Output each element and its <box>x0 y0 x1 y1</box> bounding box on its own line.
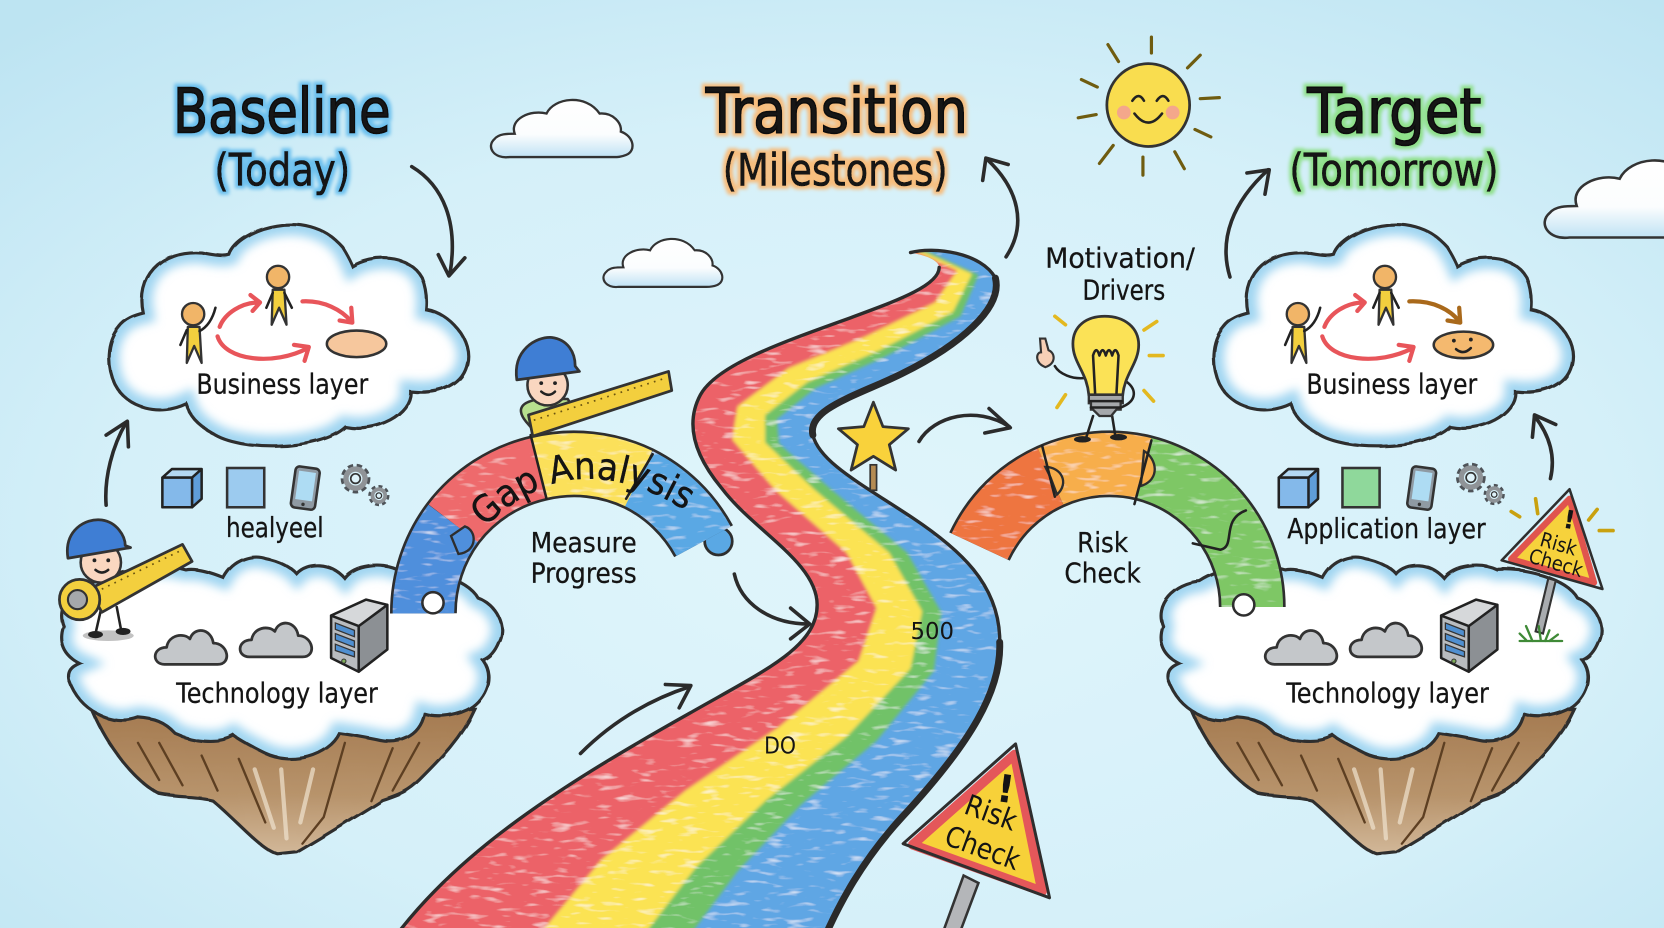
icon: server tower <box>1441 600 1497 672</box>
cloud shape <box>109 225 468 446</box>
road heavy shaded edge <box>812 278 1000 928</box>
heading: Target (Tomorrow) <box>1289 76 1498 197</box>
sign text: Risk Check: Risk <box>1537 527 1580 561</box>
process arrows <box>1322 295 1460 361</box>
rainbow road <box>400 248 1004 928</box>
heading: Transition (Milestones) <box>705 76 968 197</box>
rock base <box>93 709 474 854</box>
panel: target business layer cloud <box>1213 225 1572 446</box>
alert rays <box>1511 499 1613 531</box>
cloud shape <box>1213 225 1572 446</box>
panel: baseline technology island <box>62 557 502 854</box>
cloud top <box>62 557 502 759</box>
exclamation mark: ! <box>1561 505 1578 536</box>
road edge outline <box>382 250 1000 928</box>
figure: waving person <box>180 303 215 363</box>
business object oval <box>327 331 386 357</box>
panel: baseline application icons <box>162 466 387 544</box>
bridge outline <box>423 464 704 613</box>
panel: target technology island <box>1161 557 1601 854</box>
bridge outline <box>980 464 1252 607</box>
icon: phone <box>1407 466 1437 510</box>
process arrows <box>218 295 352 361</box>
cloud: small sky cloud <box>603 239 722 287</box>
arrow: target technology to business <box>1532 415 1556 479</box>
panel: baseline business layer cloud <box>109 225 468 446</box>
exclamation mark: ! <box>994 767 1017 813</box>
label: Risk Check <box>1064 526 1141 590</box>
label: healyeel: healyeel <box>226 511 324 544</box>
sign text: Risk Check: Risk <box>960 788 1022 838</box>
figure: waving person <box>1285 303 1320 363</box>
smiling object oval <box>1434 332 1493 358</box>
puzzle bridge: risk check <box>980 440 1254 616</box>
label: Motivation / Drivers: Motivation/ <box>1045 241 1196 274</box>
puzzle bridge: gap analysis <box>390 430 734 615</box>
sign: small risk check <box>1502 489 1613 641</box>
icon: gears <box>344 467 387 504</box>
sign post <box>942 876 978 928</box>
subtitle: Tomorrow: (Tomorrow) <box>1289 145 1498 197</box>
puzzle joints <box>422 435 653 613</box>
title: Target: Target <box>1307 76 1481 148</box>
arrow: motivation to transition title <box>983 158 1018 257</box>
sign text: Risk Check <box>940 788 1025 877</box>
sign text: Risk Check: Check <box>940 819 1025 877</box>
icon: gears <box>1459 466 1502 502</box>
label: Technology layer: Technology layer <box>175 677 378 710</box>
icon: worker with tape measure <box>59 520 192 641</box>
icon: server tower <box>331 600 387 672</box>
arrow: baseline title to business cloud <box>412 167 465 276</box>
icon: grey cloud <box>155 630 227 664</box>
label: Application layer: Application layer <box>1287 512 1486 545</box>
label: Business layer: Business layer <box>1306 368 1478 401</box>
icon: grey cloud <box>1350 623 1422 657</box>
icon: cube <box>162 469 202 507</box>
cloud: right edge sky cloud <box>1545 160 1664 238</box>
label: Motivation / Drivers: Drivers <box>1082 273 1165 306</box>
label: Measure Progress <box>531 526 637 590</box>
subtitle: Today: (Today) <box>214 145 350 197</box>
heading: Baseline (Today) <box>173 76 391 197</box>
rock base <box>1193 709 1574 854</box>
figure: standing person <box>1373 266 1399 325</box>
warning triangle <box>913 755 1042 891</box>
bridge segments <box>980 464 1252 607</box>
label: Measure Progress: Measure <box>531 526 637 559</box>
arrow: measure progress to road <box>734 574 810 639</box>
bridge segments <box>423 464 704 613</box>
icon: star milestone on post <box>838 402 908 490</box>
label: Business layer: Business layer <box>196 368 369 401</box>
icon: worker with ruler on bridge <box>516 337 672 436</box>
road label: DO: DO <box>764 731 796 759</box>
arrow: technology up to business layer <box>106 421 128 505</box>
road label: 500: 500 <box>911 617 954 645</box>
grass tuft <box>1520 626 1562 641</box>
icon: phone <box>290 466 320 510</box>
icon: green tablet <box>1342 468 1380 507</box>
label: Risk Check: Risk <box>1077 526 1128 559</box>
cloud: sky cloud near title <box>491 100 633 157</box>
panel: target application icons <box>1279 466 1502 545</box>
icon: tablet <box>227 468 264 507</box>
curved label: Gap Analysis: Gap Analysis <box>472 454 694 522</box>
puzzle end knob <box>705 527 732 555</box>
title: Baseline: Baseline <box>173 76 391 148</box>
sign text: Risk Check <box>1526 527 1586 582</box>
label: Risk Check: Check <box>1064 557 1141 590</box>
arrow: motivation to target title <box>1226 170 1269 277</box>
sign post <box>1536 578 1556 634</box>
label: Measure Progress: Progress <box>531 557 637 590</box>
icon: grey cloud <box>1265 630 1337 664</box>
sign text: Risk Check: Check <box>1526 544 1586 582</box>
cloud top <box>1161 557 1601 759</box>
warning triangle <box>1511 499 1594 583</box>
title: Transition: Transition <box>705 76 968 148</box>
figure: standing person <box>266 266 292 325</box>
sign: large risk check <box>903 744 1050 928</box>
label: Technology layer: Technology layer <box>1285 677 1489 710</box>
subtitle: Milestones: (Milestones) <box>723 145 948 197</box>
icon: cube <box>1279 469 1318 507</box>
icon: smiling sun <box>1078 37 1219 175</box>
puzzle joints <box>1042 440 1254 616</box>
arrow: star to lightbulb <box>919 409 1010 441</box>
label: Motivation / Drivers <box>1045 241 1196 306</box>
icon: lightbulb character <box>1037 316 1163 443</box>
icon: grey cloud <box>240 623 312 657</box>
arrow: up to the road <box>580 684 691 753</box>
